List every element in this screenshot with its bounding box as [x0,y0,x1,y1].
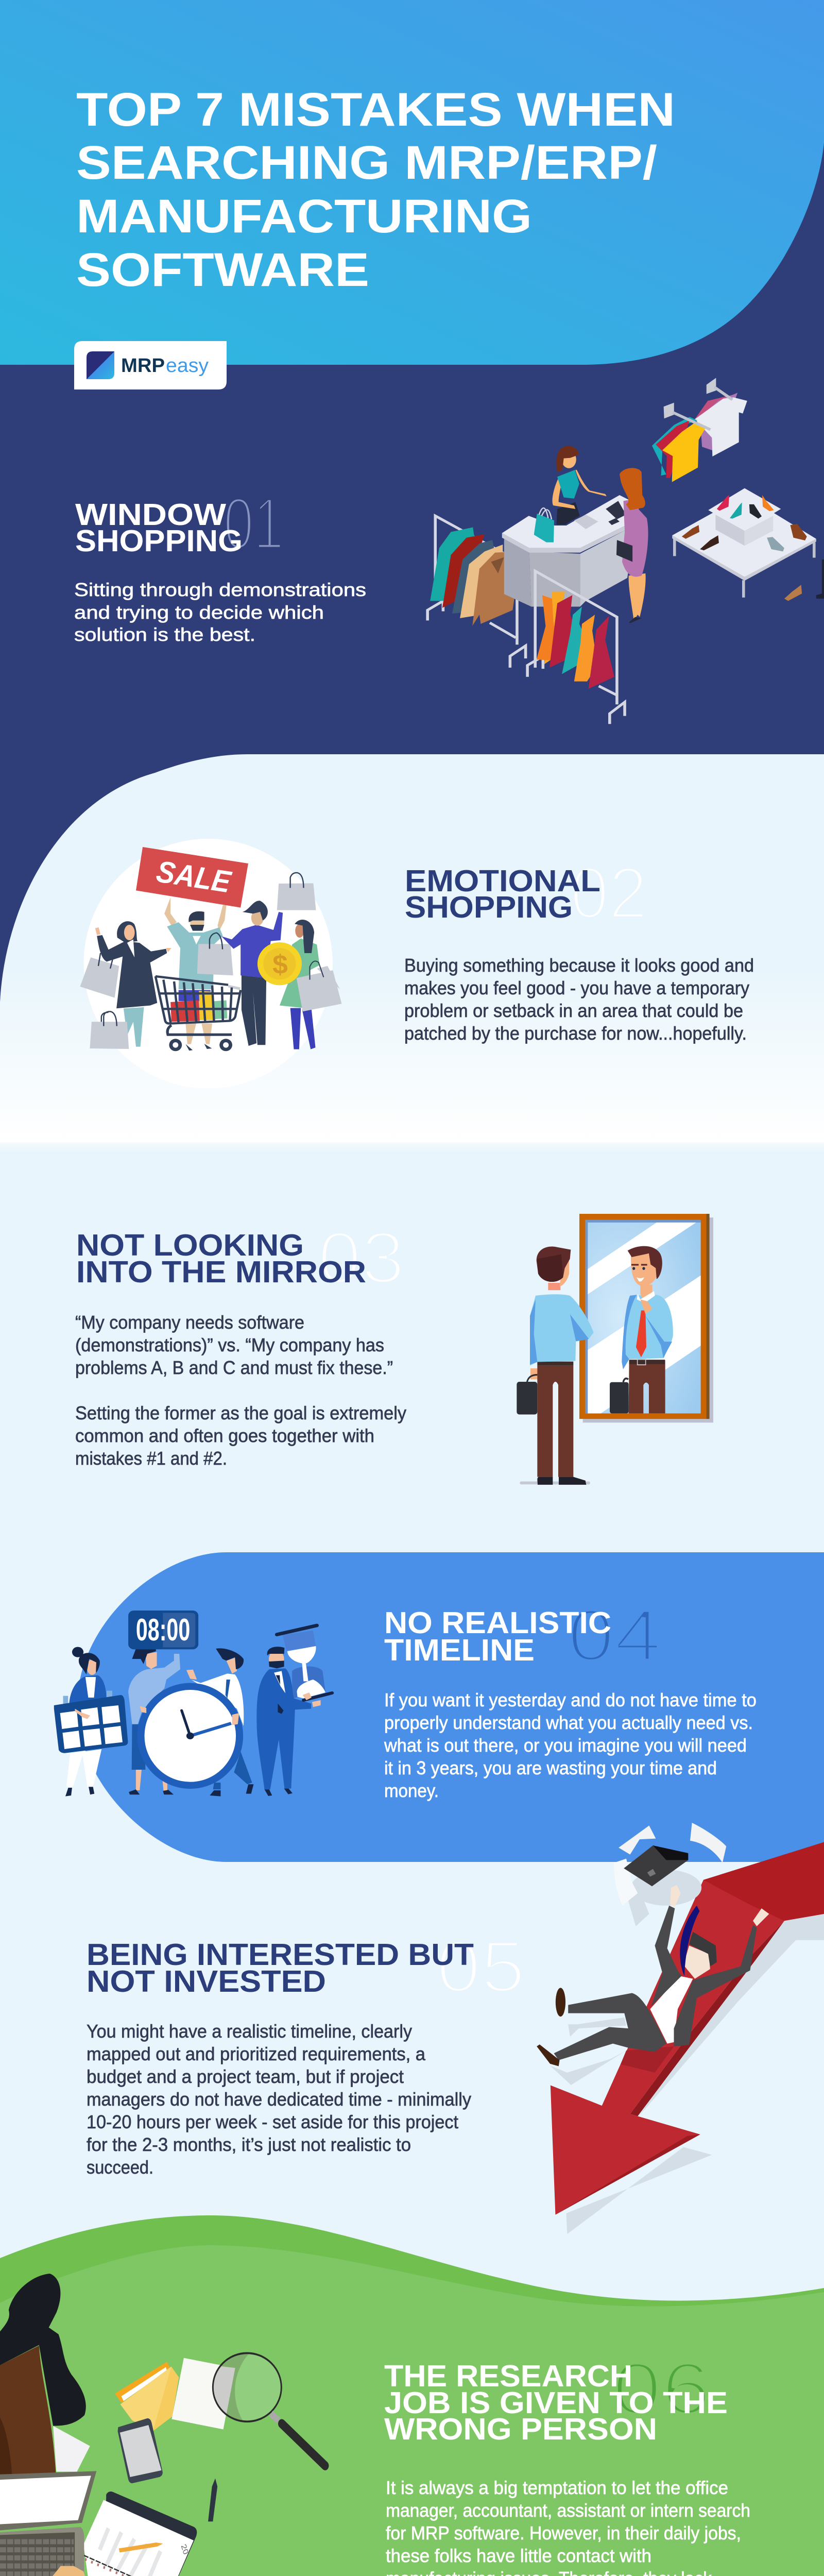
text: being interested description: for the 2-3 months, it’s just not realistic to [87,2134,411,2155]
icon: man with sign [164,897,227,1050]
text: not looking into the mirror description [75,1312,406,1469]
icon: gold coin [258,942,302,985]
heading: emotional shopping [405,864,600,924]
panel: inner green wave [0,2245,824,2576]
icon: businessman from behind [517,1247,594,1485]
text: window shopping description: Sitting through demonstrations [74,579,366,600]
heading: research job given to wrong person: WRONG PERSON [384,2412,657,2446]
icon: wall rail with shirts [652,378,747,482]
text: being interested description: budget and a project team, but if project [87,2066,404,2087]
icon: notebook: 20 [179,2543,190,2556]
icon: SALE sign: SALE [154,854,234,899]
text: being interested description: managers do not have dedicated time - minimally [87,2089,471,2110]
icon: gold coin: $ [272,950,288,979]
heading: research job given to wrong person: JOB IS GIVEN TO THE [384,2386,728,2420]
text: window shopping description: solution is the best. [74,624,255,645]
text: no realistic timeline description: properly understand what you actually need vs. [384,1712,753,1733]
illustration: people with clock and hourglass [54,1611,332,1797]
icon: falling businessman [537,1885,769,2085]
icon: person in blue sweater [217,901,283,1046]
text: emotional shopping description [404,955,754,1044]
icon: shopping cart [156,976,241,1051]
heading: window shopping: WINDOW [75,498,226,532]
heading: research job given to wrong person [384,2359,728,2446]
text: no realistic timeline description: If you want it yesterday and do not have time to [384,1689,757,1710]
heading: emotional shopping: SHOPPING [405,890,573,924]
text: research job description: these folks have little contact with [386,2545,651,2566]
text: research job description: for MRP software. However, in their daily jobs, [386,2522,741,2544]
text: not looking into the mirror description: Setting the former as the goal is extremely [75,1402,406,1423]
panel: blue header [0,0,824,365]
heading: no realistic timeline: NO REALISTIC [384,1606,611,1640]
text: emotional shopping description: makes you feel good - you have a temporary [404,977,749,998]
heading: no realistic timeline [384,1606,611,1667]
icon: pen [208,2479,217,2521]
icon: red falling arrow [551,1842,824,2215]
text: no realistic timeline description: money. [384,1780,439,1801]
icon: coat rack [427,516,526,668]
icon: man behind clock [186,1648,253,1797]
icon: person with digital clock: 08:00 [136,1613,190,1647]
number: 01: 01 [224,483,284,565]
text: research job description: manager, accountant, assistant or intern search [386,2500,750,2521]
heading: not looking into the mirror [76,1228,366,1289]
text: research job description [386,2477,751,2576]
text: no realistic timeline description [384,1689,757,1801]
heading: being interested but not invested: BEING INTERESTED BUT [87,1938,474,1972]
icon: person with digital clock [128,1611,198,1794]
icon: briefcase and papers [614,1823,726,1926]
icon: magnifying glass [208,2348,325,2466]
icon: paper [171,2358,235,2429]
title: TOP 7 MISTAKES WHEN [76,83,675,136]
text: being interested description [87,2021,471,2178]
icon: person from above [0,2274,86,2476]
number: 04: 04 [568,1595,661,1676]
heading: being interested but not invested: NOT INVESTED [87,1964,326,1998]
icon: big clock [137,1683,243,1789]
panel: white circle [83,839,333,1089]
title [76,83,675,296]
icon: bearded man in suit with hourglass [256,1625,332,1796]
panel: section 3 top band [0,1142,824,1153]
heading: not looking into the mirror: INTO THE MIRROR [76,1255,366,1289]
text: window shopping description [74,579,366,645]
text: being interested description: succeed. [87,2157,153,2178]
panel: section 2 background [0,754,824,1142]
number: 02: 02 [570,852,647,934]
icon: calendar [54,1695,128,1753]
icon: arrow shadows [566,1914,824,2234]
illustration: desk seen from above [0,2274,325,2576]
heading: being interested but not invested [87,1938,474,1998]
icon: phone [118,2418,163,2483]
text: no realistic timeline description: it in 3 years, you are wasting your time and [384,1757,717,1778]
panel: outer green wave [0,2215,824,2370]
illustration: falling businessman on red arrow [537,1823,824,2234]
icon: paper under hair [53,2426,90,2471]
logo: top MRPeasy [74,341,227,389]
heading: research job given to wrong person: THE RESEARCH [384,2359,632,2393]
title: MANUFACTURING [76,190,532,243]
logo: top MRPeasy: easy [166,355,209,377]
icon: counter [502,446,640,607]
panel: navy section 1 background [0,103,824,1030]
text: window shopping description: and trying to decide which [74,602,324,623]
icon: hand and sleeve [0,2566,116,2576]
text: research job description: It is always a big temptation to let the office [386,2477,728,2498]
text: not looking into the mirror description: (demonstrations)” vs. “My company has [75,1334,384,1355]
icon: laptop [0,2471,96,2576]
text: not looking into the mirror description: problems A, B and C and must fix these.” [75,1357,393,1378]
text: being interested description: You might have a realistic timeline, clearly [87,2021,412,2042]
text: emotional shopping description: Buying something because it looks good and [404,955,754,976]
panel: blue timeline band [77,1552,824,1862]
illustration: shopping crowd with SALE sign [80,839,341,1089]
logo: top MRPeasy: MRP [121,355,165,377]
text: emotional shopping description: patched by the purchase for now...hopefully. [404,1023,747,1044]
text: no realistic timeline description: what is out there, or you imagine you will need [384,1735,747,1756]
heading: emotional shopping: EMOTIONAL [405,864,600,898]
icon: folder [115,2362,179,2431]
heading: not looking into the mirror: NOT LOOKING [76,1228,304,1262]
icon: notebook [83,2492,197,2576]
heading: window shopping [75,498,243,558]
icon: woman in dark coat [80,921,171,1047]
heading: window shopping: SHOPPING [75,524,243,558]
text: not looking into the mirror description: “My company needs software [75,1312,304,1333]
text: being interested description: mapped out and prioritized requirements, a [87,2043,426,2064]
icon: reflection [610,1246,673,1413]
number: 06: 06 [612,2348,711,2430]
number: 03: 03 [318,1217,405,1299]
icon: shopping bags [90,873,316,1049]
illustration: man at mirror [517,1214,713,1485]
text: not looking into the mirror description: mistakes #1 and #2. [75,1448,227,1469]
icon: woman in green [280,920,341,1049]
icon: shopper woman [616,468,648,623]
icon: mirror [579,1214,713,1422]
heading: no realistic timeline: TIMELINE [384,1633,535,1667]
icon: SALE sign [136,847,248,908]
icon: dress rack [527,571,625,724]
title: SEARCHING MRP/ERP/ [76,137,657,189]
text: emotional shopping description: problem or setback in an area that could be [404,1000,743,1021]
icon: woman with calendar [63,1647,112,1797]
illustration: clothing store [427,378,824,724]
text: not looking into the mirror description: common and often goes together with [75,1425,374,1446]
text: being interested description: 10-20 hours per week - set aside for this project [87,2111,458,2132]
title: SOFTWARE [76,244,369,296]
icon: shoe table [672,488,824,601]
number: 05: 05 [436,1926,525,2008]
